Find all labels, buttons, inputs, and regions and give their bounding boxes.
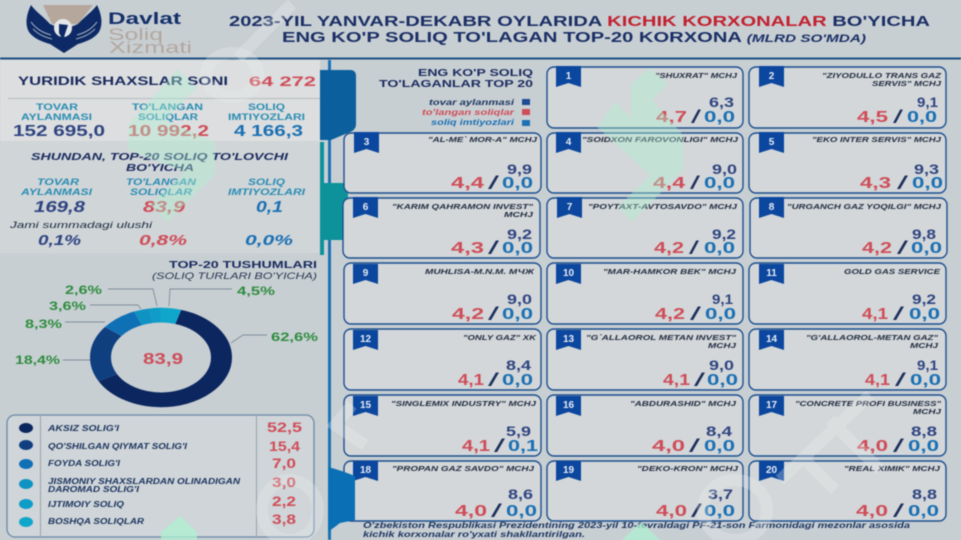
title: ENG KO'P SOLIQ TO'LAGAN TOP-20 KORXONA (MLRD SO'MDA) — [282, 30, 866, 46]
card 7: 0,0 — [704, 240, 735, 257]
card 8: / — [897, 238, 908, 258]
card 12: 0,0 — [502, 372, 533, 389]
card 6: 4,3 — [451, 240, 484, 257]
card 7: 4,2 — [654, 240, 684, 257]
legend table: IJTIMOIY SOLIQ — [48, 500, 124, 509]
card 1: "SHUXRAT" MCHJ — [655, 71, 738, 80]
card 11: 0,0 — [909, 306, 940, 323]
card 15: "SINGLEMIX INDUSTRY" MCHJ — [391, 399, 537, 408]
card 4: 4 — [566, 137, 572, 148]
panel: top-20 taxpayers: IMTIYOZLARI — [228, 187, 306, 197]
heading: top-20 revenue: TOP-20 TUSHUMLARI — [169, 259, 317, 271]
card 3: / — [488, 173, 499, 193]
card 11 — [749, 263, 946, 324]
card 15: 0,1 — [508, 438, 538, 455]
logo: Davlat Soliq Xizmati: Soliq — [108, 25, 163, 44]
card 13: 0,0 — [707, 372, 738, 389]
card 10: 0,0 — [705, 306, 736, 323]
card 3: "AL-ME` MOR-A" MCHJ — [428, 135, 538, 144]
card 9: / — [488, 304, 499, 324]
panel: legal entities: AYLANMASI — [21, 112, 92, 122]
panel: top-20 taxpayers: 0,1 — [256, 199, 283, 216]
panel: legal entities — [0, 60, 320, 141]
panel: top-20 taxpayers: SOLIQLAR — [130, 187, 193, 197]
legend table: 3,0 — [272, 475, 296, 490]
card 20: "REAL XIMIK" MCHJ — [844, 464, 941, 473]
card 17: "CONCRETE PROFI BUSINESS" — [795, 399, 941, 408]
card 14: / — [895, 370, 906, 390]
legend table: JISMONIY SHAXSLARDAN OLINADIGAN — [48, 477, 240, 486]
heading: top-20 revenue: (SOLIQ TURLARI BO'YICHA) — [152, 271, 317, 282]
card 5: / — [897, 173, 908, 193]
right heading: top 20: ENG KO'P SOLIQ — [418, 67, 533, 79]
panel: top-20 taxpayers: TO'LANGAN — [126, 177, 197, 187]
right heading: top 20 — [379, 67, 533, 90]
panel: top-20 taxpayers — [0, 141, 320, 253]
card 18: / — [491, 501, 502, 521]
card 16: 8,4 — [706, 423, 732, 439]
card 12: 12 — [360, 334, 371, 345]
heading: top-20 revenue — [152, 259, 317, 282]
panel: top-20 taxpayers: 0,1% — [38, 233, 81, 249]
donut chart: 18,4% — [15, 355, 60, 367]
card 17 — [749, 395, 946, 456]
logo: Davlat Soliq Xizmati — [27, 5, 192, 57]
card 10: 10 — [563, 268, 574, 279]
legend table: 2,2 — [272, 494, 296, 509]
donut chart: 83,9 — [143, 351, 183, 368]
card 2: 2 — [769, 71, 775, 82]
card 7: "POYTAXT-AVTOSAVDO" MCHJ — [588, 202, 738, 211]
card 1: 4,7 — [656, 109, 687, 126]
card 7: / — [689, 238, 699, 258]
card 2: 0,0 — [907, 109, 937, 126]
card 11: 4,1 — [862, 306, 888, 323]
card 10: / — [690, 304, 701, 324]
card 20: / — [893, 501, 904, 521]
card 13: "G`ALLAOROL METAN INVEST" — [586, 333, 737, 342]
card 8: 4,2 — [862, 240, 892, 257]
card 14: 9,1 — [917, 357, 938, 373]
card 13: 4,1 — [663, 372, 690, 389]
card 16: / — [689, 436, 700, 456]
card 12: 8,4 — [506, 357, 531, 373]
panel: legal entities: 4 166,3 — [234, 123, 304, 140]
card 14: 4,1 — [865, 372, 890, 389]
card 18: 4,0 — [455, 503, 487, 520]
footnote: kichik korxonalar ro'yxati shakllantirilgan. — [363, 529, 585, 539]
card 4: / — [690, 173, 700, 193]
card 19: 3,7 — [708, 486, 733, 502]
card 2: 4,5 — [857, 109, 888, 126]
card 20: 4,0 — [856, 503, 888, 520]
card 6: / — [488, 238, 499, 258]
panel: top-20 taxpayers: AYLANMASI — [20, 187, 93, 197]
panel: top-20 taxpayers: TOVAR — [37, 177, 80, 187]
card 9: 9 — [363, 268, 369, 279]
card 1: 1 — [566, 71, 572, 82]
card 1: 0,0 — [704, 109, 735, 126]
card 19: 0,0 — [704, 503, 735, 520]
panel: legal entities: SOLIQLAR — [138, 112, 199, 122]
card 10: "MAR-HAMKOR BEK" MCHJ — [603, 267, 737, 276]
card 18: "PROPAN GAZ SAVDO" MCHJ — [392, 464, 535, 473]
card 7: 9,2 — [712, 226, 736, 242]
card 12: "ONLY GAZ" XK — [463, 333, 537, 342]
card 13: 9,0 — [709, 357, 734, 373]
legend table: 15,4 — [269, 439, 301, 454]
card 16: "ABDURASHID" MCHJ — [630, 399, 737, 408]
card 17: / — [893, 436, 904, 456]
legend table: 3,8 — [272, 512, 297, 527]
card 13: 13 — [563, 334, 574, 345]
colour key: soliq imtiyozlari — [431, 117, 515, 127]
card 1: / — [691, 107, 701, 127]
card 1: 6,3 — [709, 94, 734, 110]
card 13 — [547, 329, 743, 390]
donut chart: 4,5% — [237, 286, 275, 298]
card 18: 0,0 — [506, 503, 537, 520]
card 20: 0,0 — [908, 503, 939, 520]
legend table: DAROMAD SOLIG'I — [48, 485, 140, 494]
card 8: "URGANCH GAZ YOQILGI" MCHJ — [787, 202, 942, 211]
card 19 — [547, 461, 743, 521]
card 11: 11 — [766, 268, 777, 279]
card 14: 0,0 — [910, 372, 941, 389]
donut chart: 8,3% — [25, 319, 62, 331]
card 16: 16 — [563, 400, 574, 411]
card 3 — [344, 132, 541, 193]
card 18: 18 — [360, 465, 371, 476]
card 15: / — [494, 436, 505, 456]
card 16 — [547, 395, 743, 456]
colour key: to'langan soliqlar — [422, 107, 515, 117]
card 18 — [344, 461, 541, 521]
card 16: 4,0 — [652, 438, 685, 455]
panel: top-20 taxpayers: Jami summadagi ulushi — [9, 220, 153, 231]
legend table: 7,0 — [272, 456, 296, 471]
card 5: 9,3 — [914, 161, 939, 177]
card 19: 4,0 — [656, 503, 687, 520]
colour key — [422, 97, 530, 127]
legend table: AKSIZ SOLIG'I — [47, 424, 120, 433]
title: 2023-YIL YANVAR-DEKABR OYLARIDA KICHIK KORXONALAR BO'YICHA — [229, 14, 931, 30]
card 17: 4,0 — [857, 438, 888, 455]
card 8: 8 — [769, 202, 775, 213]
card 10 — [547, 263, 743, 324]
panel: legal entities: SOLIQ — [248, 102, 285, 112]
side tab: teal — [320, 142, 348, 255]
panel: legal entities: 152 695,0 — [13, 123, 105, 140]
panel: top-20 taxpayers: BO'YICHA — [126, 162, 194, 174]
card 16: 0,0 — [704, 438, 735, 455]
card 12 — [344, 329, 541, 390]
donut chart: 3,6% — [49, 301, 86, 313]
card 2: SERVIS" MCHJ — [872, 79, 942, 88]
card 6 — [343, 197, 540, 258]
legend table: BOSHQA SOLIQLAR — [48, 517, 144, 526]
card 14: "G'ALLAOROL-METAN GAZ" — [806, 333, 938, 342]
logo: Davlat Soliq Xizmati: Davlat — [108, 9, 181, 28]
heading: legal entities count: YURIDIK SHAXSLAR SONI — [18, 74, 228, 88]
card 18: 8,6 — [508, 486, 533, 502]
card 4 — [547, 132, 743, 193]
card 2: "ZIYODULLO TRANS GAZ — [822, 71, 941, 80]
card 5 — [749, 132, 946, 193]
legend table: FOYDA SOLIG'I — [48, 459, 121, 468]
panel: legal entities: TOVAR — [36, 102, 79, 112]
card 5: 4,3 — [860, 175, 891, 192]
legend table — [7, 415, 314, 537]
right heading: top 20: TO'LAGANLAR TOP 20 — [379, 78, 533, 90]
card 6: MCHJ — [504, 210, 534, 219]
card 15: 5,9 — [506, 423, 531, 439]
panel: legal entities: IMTIYOZLARI — [228, 112, 305, 122]
card 9: 9,0 — [507, 291, 532, 307]
card 4: 4,4 — [653, 175, 685, 192]
card 3: 0,0 — [502, 175, 533, 192]
card 10: 4,2 — [655, 306, 685, 323]
side tab: blue top — [320, 70, 356, 140]
card 6: 6 — [363, 202, 369, 213]
colour key: tovar aylanmasi — [429, 97, 515, 107]
card 17: 8,8 — [911, 423, 937, 439]
card 5: 5 — [769, 137, 775, 148]
card 9: 0,0 — [502, 306, 533, 323]
card 19: 19 — [563, 465, 574, 476]
card 3: 9,9 — [507, 161, 532, 177]
card 17: MCHJ — [913, 407, 942, 416]
panel: top-20 taxpayers: SOLIQ — [248, 177, 285, 187]
card 15: 4,1 — [462, 438, 490, 455]
card 19: / — [691, 501, 702, 521]
card 8: 9,8 — [912, 226, 936, 242]
card 10: 9,1 — [712, 291, 733, 307]
card 3: 4,4 — [451, 175, 484, 192]
side tab: blue bottom — [328, 467, 355, 532]
card 8: 0,0 — [911, 240, 942, 257]
card 17: 0,0 — [908, 438, 939, 455]
card 15 — [344, 395, 541, 456]
card 19: "DEKO-KRON" MCHJ — [637, 464, 739, 473]
title — [229, 14, 931, 46]
card 14 — [749, 329, 946, 390]
card 7: 7 — [567, 202, 573, 213]
card 6: "KARIM QAHRAMON INVEST" — [392, 202, 534, 211]
card 6: 0,0 — [502, 240, 533, 257]
card 17: 17 — [766, 400, 777, 411]
card 9: MUHLISA-M.N.M. МЧЖ — [425, 267, 535, 276]
card 11: / — [893, 304, 904, 324]
card 6: 9,2 — [507, 226, 532, 242]
card 11: GOLD GAS SERVICE — [844, 267, 941, 276]
panel: legal entities: 64 272 — [249, 73, 316, 89]
card 13: / — [694, 370, 705, 390]
panel: top-20 taxpayers: 83,9 — [143, 199, 186, 216]
card 12: / — [488, 370, 499, 390]
card 1 — [547, 66, 743, 128]
card 14: 14 — [766, 334, 777, 345]
card 4: 0,0 — [704, 175, 735, 192]
card 2: 9,1 — [917, 94, 938, 110]
card 5: 0,0 — [912, 175, 943, 192]
card 8 — [750, 197, 947, 258]
donut chart — [15, 285, 318, 400]
card 12: 4,1 — [458, 372, 484, 389]
card 2: / — [893, 107, 903, 127]
card 9 — [344, 263, 541, 324]
legend table: 52,5 — [267, 420, 303, 435]
donut chart: 2,6% — [65, 285, 102, 297]
donut chart: 62,6% — [271, 332, 318, 344]
card 4: 9,0 — [712, 161, 737, 177]
panel: top-20 taxpayers: 169,8 — [34, 199, 85, 216]
legend table: QO'SHILGAN QIYMAT SOLIG'I — [48, 442, 188, 451]
panel: top-20 taxpayers: 0,0% — [245, 233, 293, 249]
card 15: 15 — [360, 400, 371, 411]
logo: Davlat Soliq Xizmati: Xizmati — [109, 38, 192, 57]
card 20: 8,8 — [912, 486, 937, 502]
card 3: 3 — [364, 137, 370, 148]
card 2 — [749, 66, 946, 128]
panel: legal entities: 10 992,2 — [128, 123, 209, 140]
card 20 — [749, 461, 946, 521]
panel: legal entities: TO'LANGAN — [132, 102, 203, 112]
panel: top-20 taxpayers: 0,8% — [139, 233, 187, 249]
card 4: "SOIDXON FAROVONLIGI" MCHJ — [582, 135, 739, 144]
panel: top-20 taxpayers: SHUNDAN, TOP-20 SOLIQ TO'LOVCHI — [31, 151, 289, 163]
card 11: 9,2 — [912, 291, 936, 307]
card 13: MCHJ — [708, 341, 737, 350]
card 5: "EKO INTER SERVIS" MCHJ — [812, 135, 942, 144]
card 9: 4,2 — [452, 306, 484, 323]
card 7 — [547, 197, 743, 258]
footnote: O'zbekiston Respublikasi Prezidentining 2023-yil 10-fevraldagi PF-21-son Farmonidagi mezonlar asosida — [363, 520, 910, 530]
card 20: 20 — [766, 465, 777, 476]
card 14: MCHJ — [910, 341, 939, 350]
footnote — [363, 520, 910, 539]
